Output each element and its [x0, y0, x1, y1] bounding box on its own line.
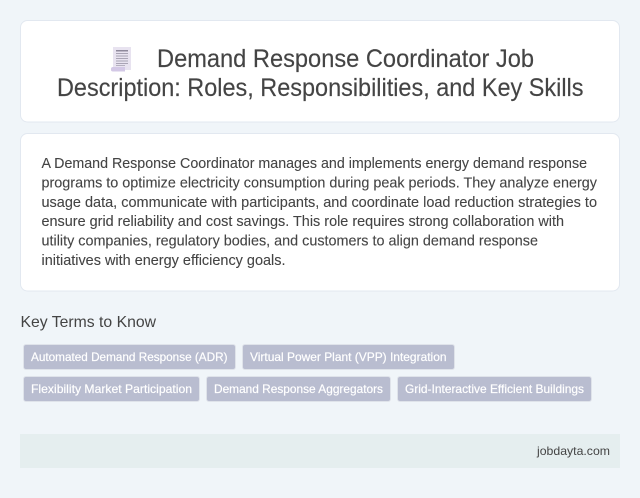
- tag: VPP: Virtual Power Plant (VPP) Integration: [250, 350, 446, 364]
- tag: flexibility market: [24, 376, 200, 402]
- tag: aggregators: Demand Response Aggregators: [214, 382, 383, 396]
- footer bar: [20, 434, 620, 468]
- text block: description: [42, 155, 597, 269]
- text block: description: A Demand Response Coordinator manages and implements energy demand response: [42, 155, 587, 172]
- tag: buildings: [398, 376, 592, 402]
- text block: description: utility companies, regulatory bodies, and customers to align demand response: [42, 233, 538, 250]
- heading: title: [57, 45, 584, 102]
- text block: description: programs to optimize electricity consumption during peak periods. They analyze energy: [42, 174, 597, 191]
- tag: flexibility market: Flexibility Market Participation: [31, 382, 192, 396]
- panel: description card: [20, 134, 620, 291]
- heading: title: Description: Roles, Responsibilities, and Key Skills: [57, 74, 584, 102]
- heading: key terms: Key Terms to Know: [20, 314, 156, 331]
- text block: description: initiatives with energy efficiency goals.: [42, 252, 286, 269]
- panel: title card: [20, 20, 620, 122]
- footer bar: jobdayta.com: [536, 444, 610, 458]
- tag: aggregators: [206, 376, 390, 402]
- heading: title: Demand Response Coordinator Job: [157, 45, 534, 73]
- tag: ADR: Automated Demand Response (ADR): [31, 350, 228, 364]
- text block: description: usage data, communicate with participants, and coordinate load reduction strategies to: [42, 194, 597, 211]
- tag: VPP: [242, 344, 454, 370]
- tag: buildings: Grid-Interactive Efficient Buildings: [405, 382, 584, 396]
- icon: document scroll: [111, 47, 131, 72]
- tag: ADR: [24, 344, 236, 370]
- text block: description: ensure grid reliability and cost savings. This role requires strong collaboration with: [42, 213, 564, 230]
